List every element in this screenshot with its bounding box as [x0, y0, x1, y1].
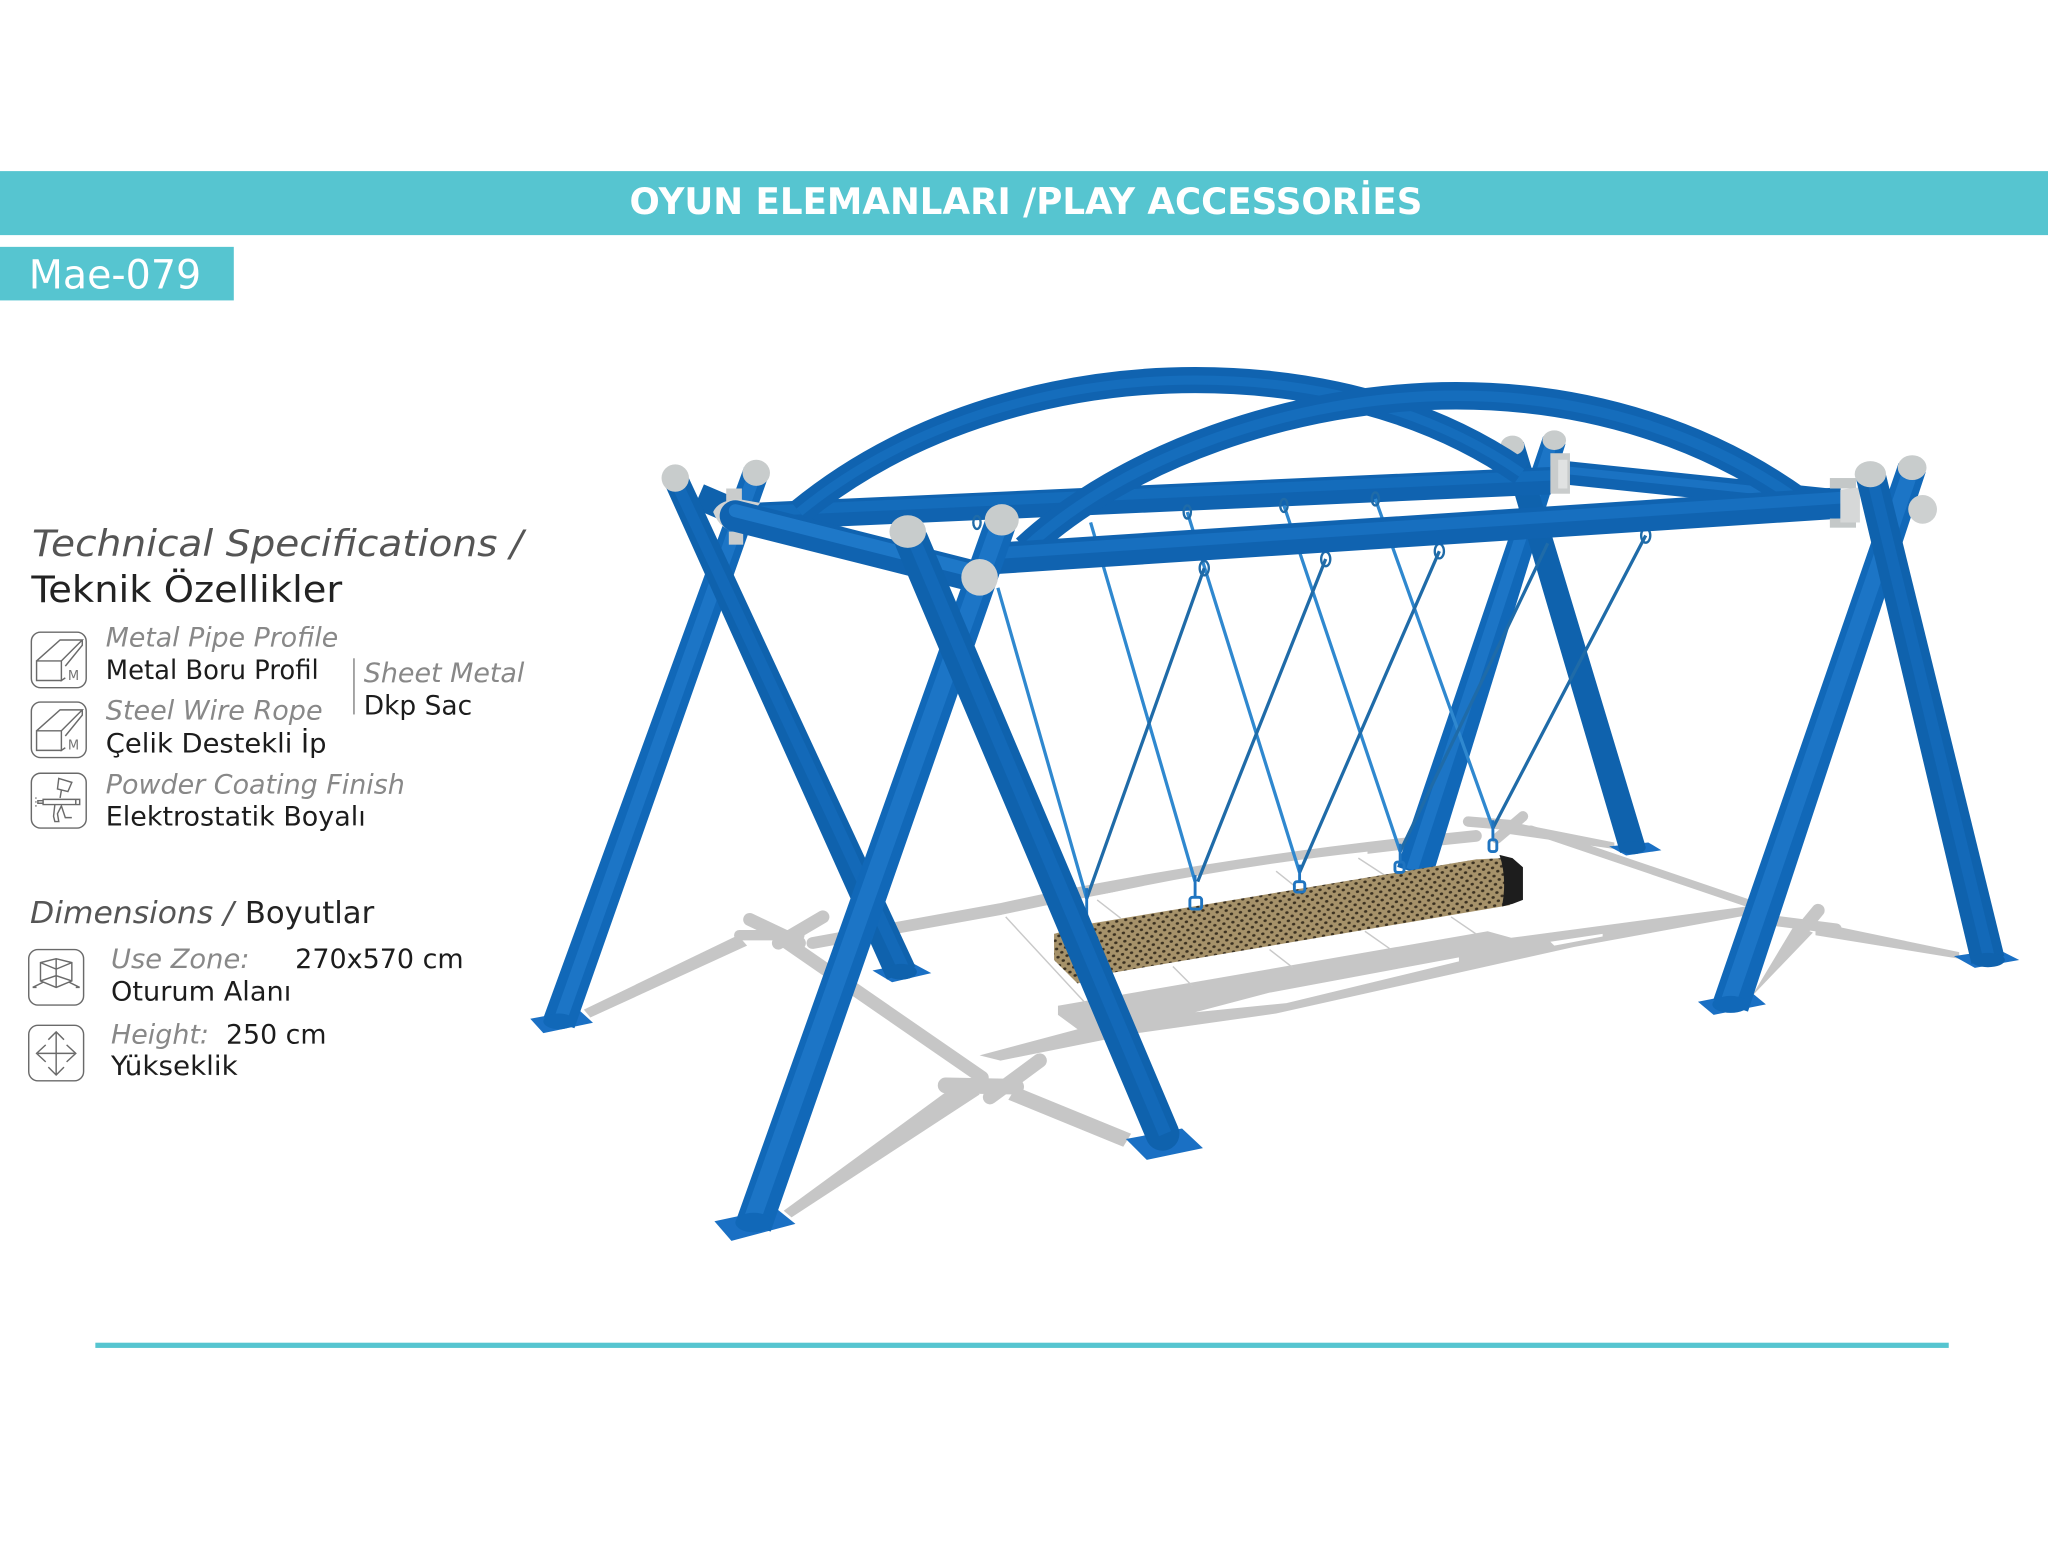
icon: height arrows	[29, 1025, 84, 1081]
bottom rule	[95, 1343, 1949, 1348]
shadow: left side of frame	[584, 917, 1131, 1217]
front right clamp	[1830, 478, 1860, 528]
dimensions heading	[30, 896, 375, 931]
spec: height: Yükseklik	[110, 1051, 238, 1082]
spec: use zone	[111, 944, 464, 1007]
dark ropes	[1087, 536, 1646, 899]
left collar	[713, 499, 760, 532]
ball end	[1908, 495, 1937, 524]
spec: height: 250 cm	[226, 1020, 327, 1051]
left clamp plates	[726, 488, 742, 502]
back beam	[738, 481, 1550, 517]
arch back	[799, 380, 1522, 512]
dimensions heading: Dimensions /	[30, 896, 237, 931]
base plates	[1698, 991, 1766, 1015]
dimensions heading: Boyutlar	[245, 896, 375, 931]
icon: metal pipe profile: M	[68, 669, 79, 684]
shadow: right side of frame	[1468, 816, 1959, 997]
base plate	[1609, 842, 1661, 856]
front left A-frame	[714, 504, 1203, 1241]
back beam and arch	[713, 380, 1829, 576]
product code tag: Mae-079	[29, 251, 201, 299]
base plates	[714, 1208, 795, 1241]
spec: use zone: 270x570 cm	[295, 944, 464, 975]
spec: steel wire rope: Steel Wire Rope	[106, 696, 323, 727]
spec: sheet metal	[354, 658, 525, 721]
rear leg	[1713, 463, 1926, 1012]
side beam right	[1566, 473, 1829, 500]
spec: metal pipe profile	[106, 623, 338, 686]
spec: powder coating finish: Elektrostatik Boyalı	[106, 801, 366, 832]
legs	[1397, 437, 1566, 878]
ground shadows	[584, 816, 1959, 1217]
spec: metal pipe profile: Metal Boru Profil	[106, 655, 319, 686]
technical specifications heading: Teknik Özellikler	[30, 568, 343, 611]
legs	[544, 467, 769, 1028]
header title: OYUN ELEMANLARI /PLAY ACCESSORİES	[630, 179, 1422, 223]
spec: height	[110, 1020, 327, 1082]
spec: use zone: Oturum Alanı	[111, 976, 291, 1007]
swing ropes	[973, 492, 1650, 899]
spec: sheet metal: Dkp Sac	[364, 690, 472, 721]
light ropes	[998, 499, 1493, 899]
front leg	[1856, 471, 2004, 964]
icon: use zone	[29, 950, 84, 1005]
product code tag	[0, 247, 234, 300]
technical specifications heading	[30, 522, 527, 611]
spec: powder coating finish	[106, 769, 405, 832]
icon: steel wire rope	[31, 702, 86, 758]
front right A-frame	[1698, 455, 2019, 1015]
spec: metal pipe profile: Metal Pipe Profile	[106, 623, 338, 654]
front beam	[986, 503, 1842, 559]
spec: height: Height:	[111, 1020, 209, 1051]
rope seat	[1054, 820, 1523, 984]
arch front	[1025, 396, 1800, 549]
icon: metal pipe profile	[31, 632, 86, 688]
header band	[0, 171, 2048, 235]
ball end	[961, 559, 998, 596]
front leg	[912, 541, 1162, 1134]
spec: steel wire rope	[106, 696, 327, 759]
rings	[973, 492, 1650, 575]
back left A-frame	[530, 460, 931, 1033]
spec: use zone: Use Zone:	[111, 944, 249, 975]
spec: powder coating finish: Powder Coating Finish	[106, 769, 405, 800]
technical specifications heading: Technical Specifications /	[32, 522, 527, 565]
shadow: front beam and seat	[980, 906, 1753, 1061]
spec: sheet metal: Sheet Metal	[364, 658, 525, 689]
side beam left	[735, 516, 973, 576]
rear leg	[737, 515, 1017, 1232]
spec: steel wire rope: Çelik Destekli İp	[106, 727, 327, 759]
chain connectors	[1087, 820, 1497, 917]
base plate	[530, 1010, 593, 1033]
back right A-frame	[1397, 430, 1661, 878]
icon: steel wire rope: M	[68, 739, 79, 754]
icon: spray gun	[31, 773, 86, 828]
front arch and beam	[986, 396, 1842, 559]
shadow: back beam and arch	[812, 836, 1476, 943]
back right clamp	[1550, 453, 1570, 494]
floor mat lines	[1006, 858, 1476, 1003]
